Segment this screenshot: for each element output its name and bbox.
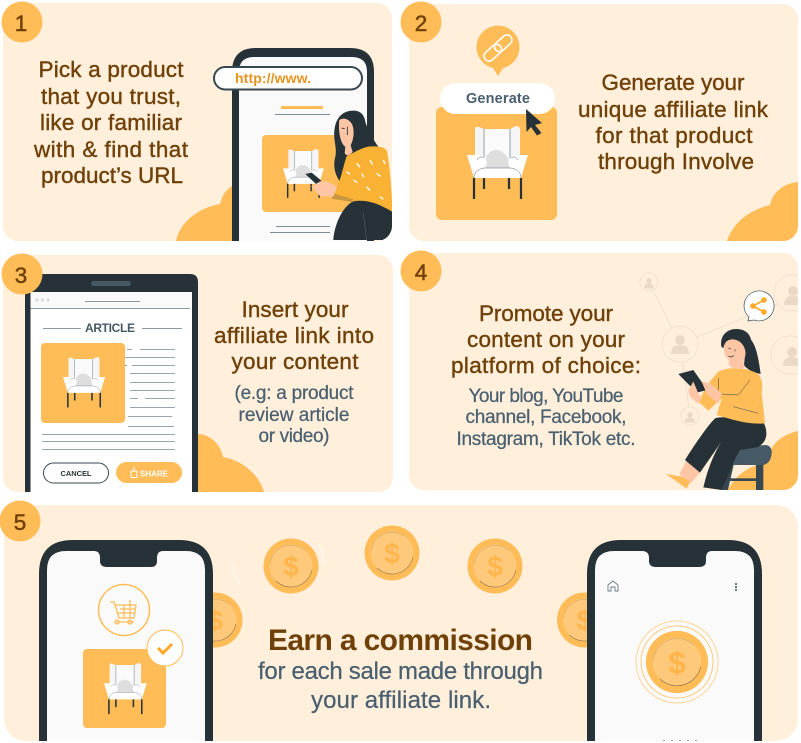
cloud shape — [176, 186, 232, 241]
step 4 text — [451, 301, 641, 450]
step 2 text: for that product — [596, 123, 753, 148]
cancel button: CANCEL — [60, 469, 92, 478]
step 1 text: like or familiar — [40, 110, 182, 135]
right phone — [587, 540, 762, 741]
panel 5: earn commission — [0, 500, 798, 741]
cloud shape — [728, 431, 798, 490]
share speech bubble — [744, 291, 774, 321]
share button — [116, 462, 182, 483]
step 2 text: unique affiliate link — [578, 97, 769, 122]
step 5 text — [258, 624, 543, 714]
badge 4 — [400, 250, 442, 292]
phone with product page — [232, 48, 374, 241]
badge 5: 5 — [14, 510, 26, 535]
badge 3 — [2, 254, 42, 294]
tablet with article: ARTICLE — [85, 321, 135, 335]
badge 4: 4 — [415, 260, 427, 285]
badge 1: 1 — [15, 11, 27, 36]
badge 5 — [0, 500, 40, 542]
coin with rings — [636, 621, 718, 703]
step 4 text: platform of choice: — [451, 353, 641, 378]
cursor arrow — [526, 109, 542, 136]
step 2 text: through Involve — [598, 149, 754, 174]
cart icon circle — [98, 584, 150, 636]
step 3 text: affiliate link into — [214, 323, 374, 348]
share button: SHARE — [140, 470, 169, 478]
woman with tablet on stool — [666, 329, 772, 490]
url bar — [214, 67, 362, 90]
step 5 text: for each sale made through — [258, 658, 543, 685]
step 1 text — [33, 57, 189, 188]
step 3 text: Insert your — [242, 297, 349, 322]
panel 4: promote — [400, 250, 801, 490]
step 1 text: that you trust, — [41, 84, 181, 109]
step 5 text: Earn a commission — [268, 624, 533, 657]
home icon — [608, 581, 618, 591]
cloud shape — [727, 182, 798, 241]
step 4 text: Promote your — [479, 301, 614, 326]
url bar: http://www. — [235, 70, 311, 86]
step 5 text: your affiliate link. — [311, 687, 491, 714]
generate button — [440, 83, 555, 114]
menu dots — [735, 583, 737, 591]
generate button: Generate — [466, 91, 530, 107]
panel 2: generate link — [400, 2, 798, 241]
badge 3: 3 — [15, 263, 27, 288]
tablet with article — [25, 274, 198, 492]
left phone — [39, 540, 213, 741]
step 4 text: Your blog, YouTube — [468, 386, 624, 407]
product card — [83, 649, 166, 728]
step 4 text: content on your — [467, 327, 626, 352]
coins — [213, 526, 587, 648]
badge 2: 2 — [415, 11, 427, 36]
step 3 text: or video) — [258, 426, 330, 447]
woman holding a phone — [305, 111, 393, 240]
step 2 text — [578, 70, 769, 174]
step 1 text: Pick a product — [38, 57, 184, 82]
check badge — [147, 630, 183, 666]
step 3 text: (e.g: a product — [234, 383, 354, 404]
step 3 text — [214, 297, 374, 447]
social network nodes — [640, 273, 801, 425]
panel 1: pick a product — [2, 2, 393, 241]
cancel button — [44, 463, 108, 483]
link bubble icon — [476, 26, 520, 76]
panel 3: insert link — [2, 254, 393, 492]
step 2 text: Generate your — [602, 70, 745, 95]
step 4 text: Instagram, TikTok etc. — [456, 429, 636, 450]
badge 1 — [2, 2, 42, 42]
product card with chair — [436, 107, 557, 220]
cloud shape — [198, 434, 264, 492]
step 1 text: with & find that — [33, 137, 189, 162]
step 1 text: product’s URL — [41, 163, 183, 188]
step 4 text: channel, Facebook, — [466, 407, 626, 428]
step 3 text: review article — [238, 405, 350, 426]
badge 2 — [400, 2, 442, 42]
step 3 text: your content — [232, 349, 359, 374]
